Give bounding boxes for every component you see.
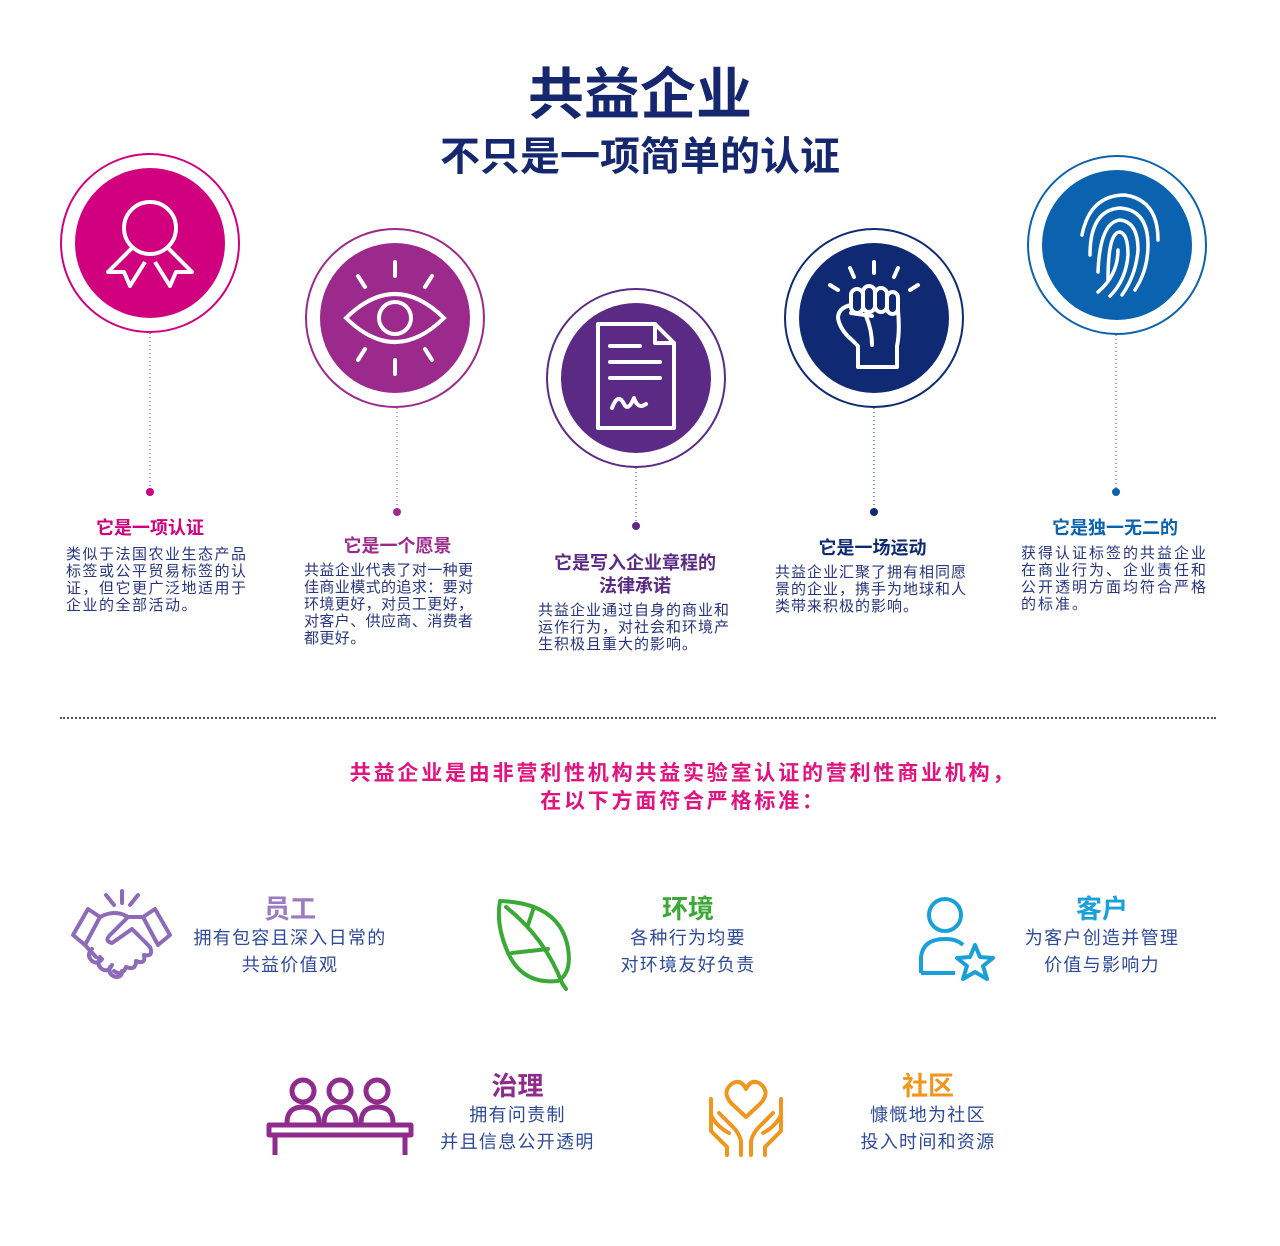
employees heading & text xyxy=(194,894,386,975)
circle 1: certification xyxy=(61,154,239,496)
circle 2: vision xyxy=(306,229,484,516)
environment heading & text: 各种行为均要 xyxy=(630,928,746,948)
community heading & text: 社区 xyxy=(902,1071,954,1101)
card 2 text: 都更好。 xyxy=(304,630,366,647)
customers heading & text: 客户 xyxy=(1076,894,1128,924)
card 3 text xyxy=(538,602,730,653)
card 2 heading: 它是一个愿景 xyxy=(344,536,452,556)
governance heading & text: 拥有问责制 xyxy=(469,1105,566,1125)
community heading & text: 投入时间和资源 xyxy=(860,1132,996,1152)
circle 4: movement xyxy=(785,229,963,516)
card 1 heading: 它是一项认证 xyxy=(96,518,204,538)
card 5 text: 的标准。 xyxy=(1021,596,1089,613)
item: community xyxy=(708,1071,996,1157)
timeline graphics xyxy=(60,153,1207,530)
card 5 text: 获得认证标签的共益企业 xyxy=(1021,545,1208,562)
circle 3: legal xyxy=(547,289,725,530)
card 3 text: 运作行为，对社会和环境产 xyxy=(538,619,730,636)
card 1 text: 标签或公平贸易标签的认 xyxy=(66,563,248,580)
card 4 text: 景的企业，携手为地球和人 xyxy=(775,581,967,598)
subtitle: 不只是一项简单的认证 xyxy=(440,135,840,179)
card 2 xyxy=(304,536,473,647)
card 5 text xyxy=(1021,545,1208,613)
card 1 text: 证，但它更广泛地适用于 xyxy=(66,580,248,597)
governance heading & text: 并且信息公开透明 xyxy=(440,1132,595,1152)
card 3 heading xyxy=(554,553,716,596)
card 4 xyxy=(775,538,967,615)
card 3 text: 生积极且重大的影响。 xyxy=(538,636,698,653)
icon: leaf xyxy=(496,899,571,992)
circle 5: fingerprint xyxy=(1028,156,1206,496)
card 2 text: 对客户、供应商、消费者 xyxy=(304,613,473,630)
card 4 heading: 它是一场运动 xyxy=(818,538,926,558)
environment heading & text: 对环境友好负责 xyxy=(620,955,756,975)
environment heading & text: 环境 xyxy=(662,894,714,924)
card 3 heading: 它是写入企业章程的 xyxy=(554,553,716,573)
governance heading & text xyxy=(440,1071,595,1152)
environment heading & text xyxy=(620,894,756,975)
community heading & text xyxy=(860,1071,996,1152)
icon: hands with heart xyxy=(708,1080,784,1157)
employees heading & text: 员工 xyxy=(264,894,316,924)
card 3 heading: 法律承诺 xyxy=(599,576,671,596)
card 5 xyxy=(1021,518,1208,613)
card 1 text: 类似于法国农业生态产品 xyxy=(66,546,248,563)
customers heading & text: 价值与影响力 xyxy=(1044,955,1160,975)
card 5 text: 在商业行为、企业责任和 xyxy=(1021,562,1208,579)
employees heading & text: 拥有包容且深入日常的 xyxy=(194,928,386,948)
customers heading & text: 为客户创造并管理 xyxy=(1025,928,1179,948)
card 3 text: 共益企业通过自身的商业和 xyxy=(538,602,730,619)
title: 共益企业 xyxy=(528,63,752,126)
icon: handshake xyxy=(70,889,172,979)
pink statement xyxy=(350,762,1016,813)
card 1 text xyxy=(66,546,248,614)
item: governance xyxy=(266,1071,595,1155)
card 3 xyxy=(538,553,730,653)
card 4 text: 共益企业汇聚了拥有相同愿 xyxy=(775,564,967,581)
card 5 heading: 它是独一无二的 xyxy=(1052,518,1178,538)
item: employees xyxy=(70,889,386,979)
community heading & text: 慷慨地为社区 xyxy=(870,1105,986,1125)
card 2 text: 共益企业代表了对一种更 xyxy=(304,562,473,579)
card 2 text xyxy=(304,562,473,647)
item: customers xyxy=(919,894,1179,982)
card 4 text: 类带来积极的影响。 xyxy=(775,598,919,615)
governance heading & text: 治理 xyxy=(491,1071,544,1101)
card 5 text: 公开透明方面均符合严格 xyxy=(1021,579,1208,596)
icon: customer with star xyxy=(919,897,995,982)
item: environment xyxy=(496,894,756,992)
pink statement: 在以下方面符合严格标准： xyxy=(540,790,826,813)
employees heading & text: 共益价值观 xyxy=(242,955,338,975)
card 2 text: 佳商业模式的追求：要对 xyxy=(304,579,473,596)
card 2 text: 环境更好，对员工更好， xyxy=(304,596,473,613)
pink statement: 共益企业是由非营利性机构共益实验室认证的营利性商业机构， xyxy=(350,762,1016,785)
card 1 xyxy=(66,518,248,614)
card 1 text: 企业的全部活动。 xyxy=(66,597,198,614)
customers heading & text xyxy=(1025,894,1179,975)
icon: board of people xyxy=(266,1078,414,1155)
card 4 text xyxy=(775,564,967,615)
